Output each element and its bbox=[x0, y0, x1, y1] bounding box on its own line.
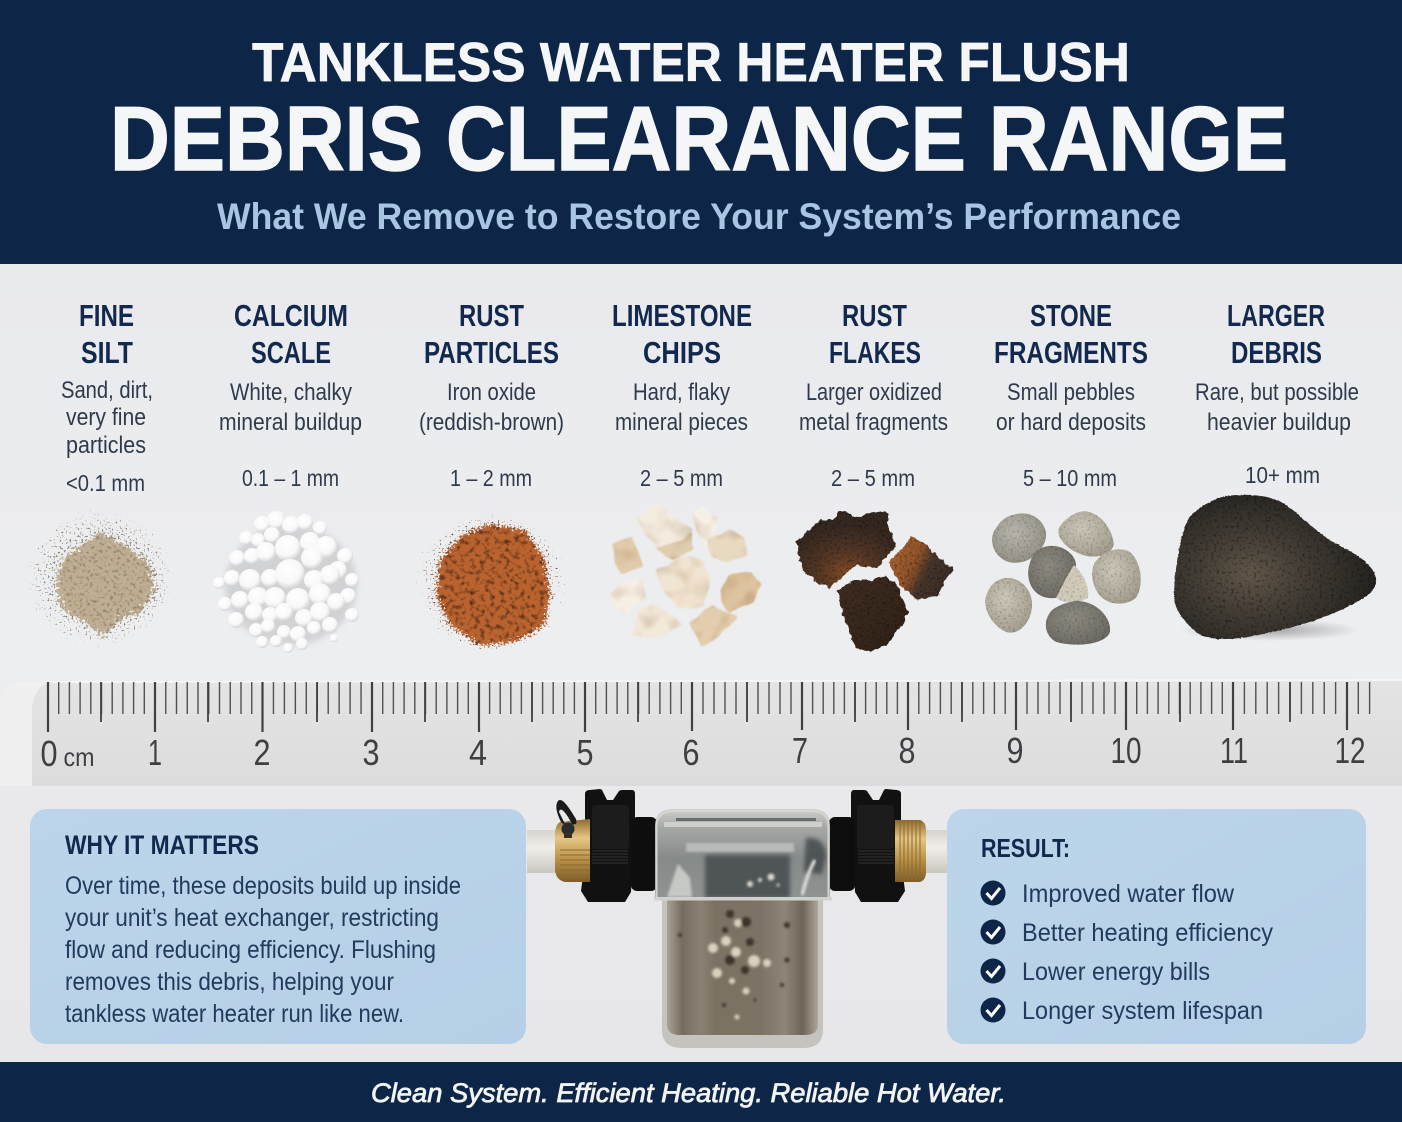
panel heading: WHY IT MATTERS bbox=[65, 830, 259, 860]
panel heading: RESULT: bbox=[981, 833, 1070, 863]
heading: DEBRIS bbox=[1231, 335, 1322, 370]
size range: 1 – 2 mm bbox=[450, 465, 532, 491]
black union right bbox=[829, 789, 905, 902]
pipes bbox=[527, 830, 947, 873]
sample: pebbles bbox=[985, 511, 1141, 645]
ruler labels: 8 bbox=[898, 730, 916, 771]
heading: LARGER bbox=[1227, 298, 1325, 333]
panel body text: Over time, these deposits build up inside bbox=[65, 872, 461, 900]
ruler labels: 4 bbox=[469, 732, 487, 773]
tagline: Clean System. Efficient Heating. Reliable Hot Water. bbox=[371, 1078, 1006, 1108]
heading bbox=[79, 298, 134, 370]
ruler labels: 12 bbox=[1334, 730, 1366, 771]
description: Larger oxidized bbox=[806, 379, 942, 406]
ruler labels: 1 bbox=[148, 732, 162, 773]
heading: PARTICLES bbox=[424, 335, 559, 370]
description: Rare, but possible bbox=[1195, 379, 1359, 406]
jar lower, sediment bbox=[662, 900, 823, 1048]
panel body text: flow and reducing efficiency. Flushing bbox=[65, 936, 436, 964]
heading bbox=[424, 298, 559, 370]
heading: FINE bbox=[79, 298, 134, 333]
header band bbox=[0, 0, 1402, 264]
sample: white calcium pellets bbox=[213, 511, 359, 653]
size range: 10+ mm bbox=[1245, 462, 1320, 488]
column: calcium scale bbox=[213, 298, 362, 653]
illustration: inline flush filter bbox=[527, 789, 947, 1048]
description: White, chalky bbox=[230, 379, 352, 406]
size range: <0.1 mm bbox=[66, 470, 145, 496]
ruler labels: 5 bbox=[576, 732, 594, 773]
size range: 2 – 5 mm bbox=[831, 465, 915, 491]
size range: 2 – 5 mm bbox=[640, 465, 723, 491]
description: Iron oxide bbox=[447, 379, 536, 406]
black union left bbox=[581, 789, 657, 902]
heading: RUST bbox=[842, 298, 907, 333]
sample: rust particle pile bbox=[407, 504, 575, 660]
heading: RUST bbox=[459, 298, 524, 333]
description bbox=[996, 379, 1146, 436]
size range: 0.1 – 1 mm bbox=[242, 465, 339, 491]
result item: longer system lifespan: Longer system lifespan bbox=[1022, 997, 1263, 1025]
ruler labels: 3 bbox=[362, 732, 380, 773]
column: fine silt bbox=[16, 298, 184, 656]
ruler labels: 6 bbox=[682, 732, 700, 773]
column: limestone chips bbox=[612, 298, 759, 644]
panel: why it matters bbox=[30, 809, 526, 1044]
description: heavier buildup bbox=[1207, 409, 1351, 436]
subtitle: What We Remove to Restore Your System’s Performance bbox=[217, 196, 1181, 237]
description: (reddish-brown) bbox=[419, 409, 564, 436]
ruler labels: 0 bbox=[40, 733, 58, 774]
title line 2: DEBRIS CLEARANCE RANGE bbox=[110, 89, 1288, 190]
result item: lower energy bills: Lower energy bills bbox=[1022, 958, 1210, 986]
panel body text: your unit’s heat exchanger, restricting bbox=[65, 904, 439, 932]
ruler labels: 2 bbox=[254, 732, 270, 773]
drain valve loop bbox=[556, 800, 576, 838]
heading: STONE bbox=[1030, 298, 1112, 333]
heading: FRAGMENTS bbox=[994, 335, 1148, 370]
ruler labels: cm bbox=[64, 742, 94, 772]
brass fittings bbox=[555, 819, 926, 882]
heading: LIMESTONE bbox=[612, 298, 752, 333]
heading: CALCIUM bbox=[234, 298, 348, 333]
column: rust flakes bbox=[796, 298, 953, 652]
panel body text: tankless water heater run like new. bbox=[65, 1000, 404, 1028]
description bbox=[1195, 379, 1359, 436]
sample: fine silt pile bbox=[16, 500, 184, 656]
description: mineral buildup bbox=[219, 409, 362, 436]
title line 1: TANKLESS WATER HEATER FLUSH bbox=[252, 31, 1130, 93]
heading: SCALE bbox=[251, 335, 331, 370]
description bbox=[219, 379, 362, 436]
heading: SILT bbox=[81, 335, 133, 370]
description: particles bbox=[66, 432, 146, 459]
result item: improved water flow: Improved water flow bbox=[1022, 880, 1235, 908]
result item: better heating efficiency: Better heating efficiency bbox=[1022, 919, 1273, 947]
sample: large rock bbox=[1174, 495, 1376, 641]
column: stone fragments bbox=[985, 298, 1148, 645]
ruler labels: 11 bbox=[1220, 730, 1248, 771]
heading bbox=[234, 298, 348, 370]
jar upper, clear dome bbox=[654, 809, 832, 900]
description: very fine bbox=[66, 404, 146, 431]
description: or hard deposits bbox=[996, 409, 1146, 436]
ruler labels: 9 bbox=[1006, 730, 1024, 771]
footer band bbox=[0, 1062, 1402, 1122]
page background bbox=[0, 264, 1402, 1062]
ruler bbox=[0, 680, 1402, 786]
column: larger debris bbox=[1174, 298, 1376, 641]
heading bbox=[612, 298, 752, 370]
heading: CHIPS bbox=[643, 335, 721, 370]
description bbox=[419, 379, 564, 436]
description: metal fragments bbox=[799, 409, 948, 436]
size range: 5 – 10 mm bbox=[1023, 465, 1117, 491]
sample: limestone chips bbox=[612, 507, 759, 644]
ruler labels: 10 bbox=[1110, 730, 1142, 771]
ruler labels: 7 bbox=[792, 730, 808, 771]
column: rust particles bbox=[407, 298, 575, 660]
description bbox=[61, 377, 153, 459]
ruler millimetre ticks bbox=[47, 682, 1372, 732]
sample: rust flakes bbox=[796, 510, 953, 652]
heading bbox=[1227, 298, 1325, 370]
heading: FLAKES bbox=[829, 335, 921, 370]
panel body text bbox=[65, 872, 461, 1028]
panel: result bbox=[947, 809, 1366, 1044]
description: Hard, flaky bbox=[633, 379, 730, 406]
description bbox=[799, 379, 948, 436]
panel body text: removes this debris, helping your bbox=[65, 968, 394, 996]
description bbox=[615, 379, 748, 436]
heading bbox=[829, 298, 921, 370]
description: Sand, dirt, bbox=[61, 377, 153, 404]
description: mineral pieces bbox=[615, 409, 748, 436]
heading bbox=[994, 298, 1148, 370]
description: Small pebbles bbox=[1007, 379, 1135, 406]
ruler labels bbox=[40, 730, 1366, 774]
